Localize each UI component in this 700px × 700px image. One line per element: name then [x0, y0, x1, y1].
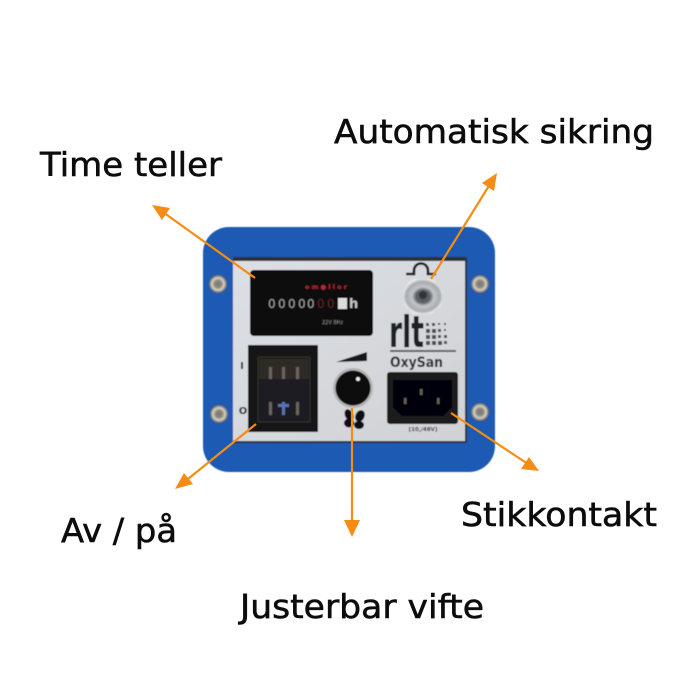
hour meter: 0 [317, 297, 325, 311]
hour meter: 0 [288, 297, 296, 311]
arrow: time counter [152, 205, 255, 278]
screw: top right [471, 275, 489, 293]
hour meter: h [349, 297, 358, 312]
hour meter: em●llor [305, 283, 348, 291]
hour meter: 0 [278, 297, 286, 311]
label: Justerbar vifte: Justerbar vifte [238, 587, 484, 626]
socket rating: [10,/48V] [409, 427, 438, 433]
speed wedge icon [336, 352, 367, 362]
automatic fuse button [403, 279, 443, 314]
hour meter: 22V 8Hz [322, 320, 343, 326]
switch mark O: O [239, 406, 247, 417]
hour meter: 0 [298, 297, 306, 311]
screw: bottom right [471, 403, 489, 421]
circuit breaker symbol [406, 264, 436, 274]
arrow: automatic fuse [431, 173, 497, 279]
label: Stikkontakt: Stikkontakt [461, 495, 657, 534]
hour meter: 0 [307, 297, 315, 311]
switch mark I: I [240, 361, 244, 372]
label: Time teller: Time teller [39, 145, 222, 184]
on/off rocker switch [248, 345, 318, 432]
label: Automatisk sikring: Automatisk sikring [334, 112, 654, 151]
logo: rlt OxySan [389, 307, 456, 371]
hour meter: 0 [268, 297, 276, 311]
fan speed knob [333, 368, 373, 408]
logo: rlt OxySan: rlt [389, 307, 424, 358]
logo: rlt OxySan: OxySan [390, 355, 443, 371]
label: Av / på: Av / på [61, 511, 177, 550]
screw: bottom left [210, 405, 228, 423]
arrow: on/off [175, 424, 256, 489]
arrow: adjustable fan [344, 408, 360, 537]
grey panel [233, 257, 467, 443]
hour meter: 0 [327, 297, 335, 311]
hour meter [250, 270, 373, 336]
blue mounting plate [203, 227, 495, 472]
screw: top left [209, 275, 227, 293]
arrow: socket [451, 413, 539, 471]
icon: fan [343, 408, 367, 429]
control panel photo [203, 227, 495, 472]
power socket [387, 372, 458, 424]
